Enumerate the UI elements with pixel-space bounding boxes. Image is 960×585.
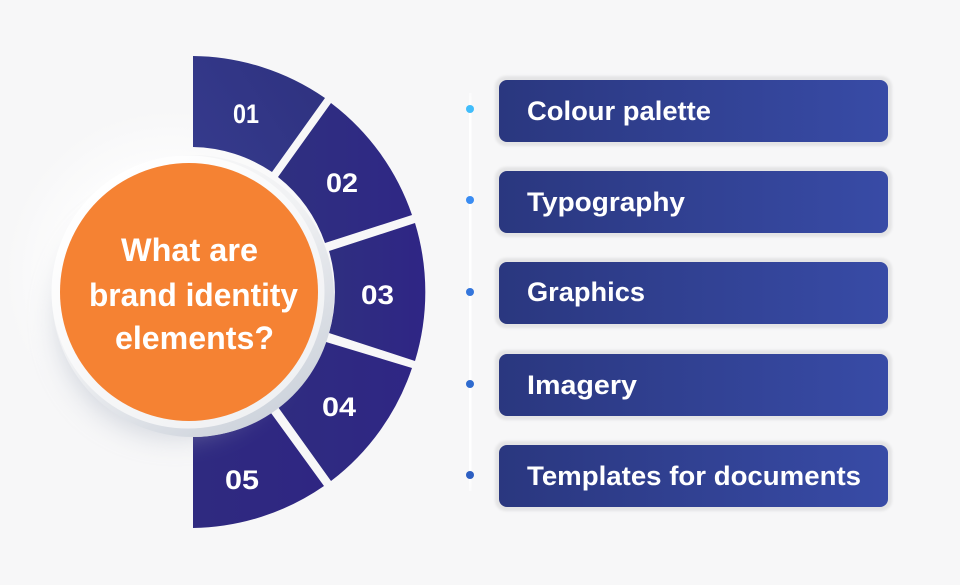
- soft glow behind hub: [5, 110, 335, 440]
- hub title: elements?: [115, 320, 274, 356]
- segment 03: 03: [361, 280, 394, 310]
- segment 02: [278, 103, 412, 243]
- hub white ring: [52, 156, 324, 428]
- list item: Templates for documents: Templates for documents: [527, 461, 861, 491]
- bullet: [466, 380, 474, 388]
- list item: Graphics: [466, 258, 892, 328]
- bullet: [466, 471, 474, 479]
- segment 04: [278, 342, 412, 481]
- list item: Colour palette: [466, 76, 892, 146]
- hub orange circle: [60, 163, 318, 421]
- segment 04: 04: [322, 392, 356, 422]
- segment 05: 05: [225, 465, 259, 495]
- list item: Templates for documents: [466, 441, 892, 511]
- list item: Graphics: Graphics: [527, 277, 645, 307]
- list item: Imagery: [466, 350, 892, 420]
- hub title: [89, 232, 298, 356]
- segment 05: [193, 413, 324, 528]
- timeline line: [469, 93, 472, 491]
- bullet: [466, 196, 474, 204]
- segmented half ring: [193, 56, 425, 528]
- segment 01: 01: [233, 99, 259, 129]
- segment 02: 02: [326, 168, 358, 198]
- bullet: [466, 288, 474, 296]
- hub title: brand identity: [89, 277, 298, 313]
- central hub: [52, 155, 334, 437]
- list item: Typography: [466, 167, 892, 237]
- list item: Colour palette: Colour palette: [527, 96, 711, 126]
- segment 01: [193, 56, 325, 172]
- hub outer disk: [52, 155, 334, 437]
- hub title: What are: [121, 232, 258, 268]
- hub shadow: [57, 200, 293, 436]
- segment 03: [329, 223, 425, 361]
- bullet: [466, 105, 474, 113]
- list item: Imagery: Imagery: [527, 370, 637, 400]
- list item: Typography: Typography: [527, 187, 685, 217]
